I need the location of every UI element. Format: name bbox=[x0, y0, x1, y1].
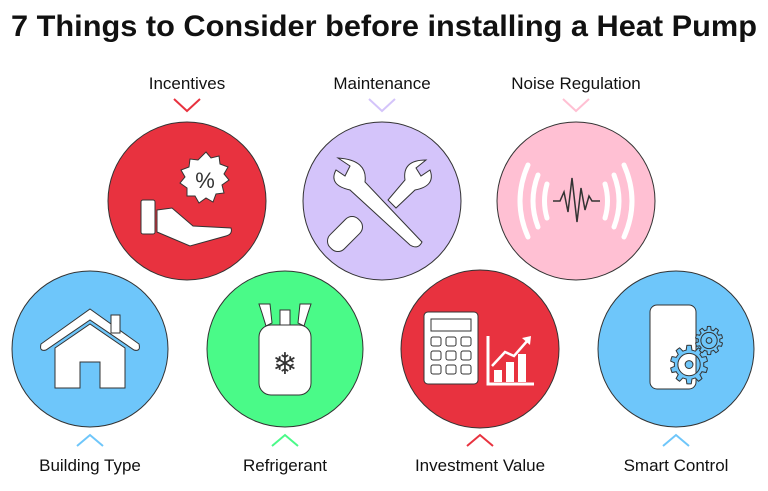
panel: incentives: % bbox=[195, 168, 215, 193]
panel: smart control: Smart Control bbox=[624, 456, 728, 475]
panel: incentives: Incentives bbox=[149, 74, 225, 93]
panel: investment value bbox=[401, 270, 559, 475]
panel: building type bbox=[12, 271, 168, 475]
panel: noise regulation: Noise Regulation bbox=[511, 74, 641, 93]
panel: smart control: ⚙ bbox=[666, 337, 712, 395]
panel: incentives bbox=[108, 74, 266, 280]
panel: refrigerant: Refrigerant bbox=[243, 456, 327, 475]
panel: investment value: Investment Value bbox=[415, 456, 545, 475]
panel: noise regulation bbox=[497, 74, 655, 280]
panel: maintenance: Maintenance bbox=[333, 74, 431, 93]
title: 7 Things to Consider before installing a Heat Pump bbox=[11, 10, 757, 43]
panel: refrigerant bbox=[207, 271, 363, 475]
panel: building type: Building Type bbox=[39, 456, 141, 475]
panel: maintenance bbox=[303, 74, 461, 280]
panel: smart control bbox=[598, 271, 754, 475]
panel: refrigerant: ❄ bbox=[272, 348, 298, 381]
panel: smart control: ⚙ bbox=[692, 321, 726, 363]
